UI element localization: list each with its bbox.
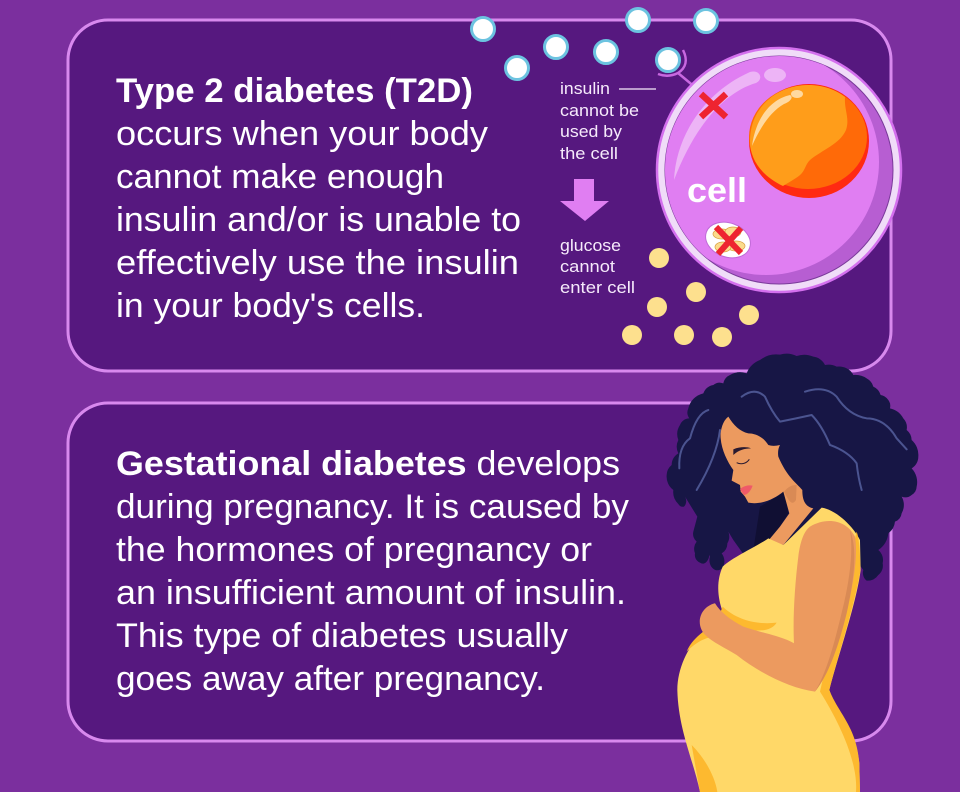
panel: gestational diabetes — [68, 403, 891, 741]
icon: insulin molecules — [472, 8, 718, 80]
text block: gestational description: during pregnancy. It is caused by — [116, 488, 629, 526]
text block: type 2 description: in your body's cells. — [116, 287, 425, 325]
text block: type 2 description: effectively use the insulin — [116, 244, 519, 282]
cell highlight — [674, 71, 760, 180]
label: insulin cannot be used: used by — [560, 122, 623, 141]
cell interior — [653, 49, 879, 275]
label: insulin cannot be used — [560, 79, 656, 163]
text block: type 2 description: insulin and/or is unable to — [116, 201, 521, 239]
arrow: down — [560, 179, 609, 221]
icon: glucose molecules — [622, 248, 759, 347]
text block: type 2 description — [116, 72, 521, 325]
text block: gestational description: Gestational diabetes develops — [116, 445, 620, 483]
label: glucose cannot enter cell: cannot — [560, 257, 615, 276]
label: insulin cannot be used: cannot be — [560, 101, 639, 120]
receptor — [658, 50, 696, 88]
panel: type 2 diabetes — [68, 20, 891, 371]
label: cell: cell — [687, 172, 747, 210]
label: insulin cannot be used: the cell — [560, 144, 618, 163]
illustration: pregnant woman — [667, 354, 918, 792]
text block: gestational description: the hormones of pregnancy or — [116, 531, 592, 569]
icon: cell diagram — [653, 48, 901, 292]
icon: mitochondrion crossed — [701, 216, 755, 264]
arm — [700, 521, 856, 692]
hair strands — [679, 389, 907, 490]
cell body — [657, 48, 901, 292]
text block: type 2 description: Type 2 diabetes (T2D) — [116, 72, 473, 110]
text block: gestational description: an insufficient amount of insulin. — [116, 574, 626, 612]
label: glucose cannot enter cell: enter cell — [560, 278, 635, 297]
neck and face — [721, 417, 813, 545]
label: insulin cannot be used: insulin — [560, 79, 610, 98]
text block: type 2 description: occurs when your body — [116, 115, 488, 153]
nucleus — [749, 84, 869, 198]
dress — [677, 508, 861, 792]
icon: red x on receptor — [701, 94, 726, 117]
text block: gestational description: This type of diabetes usually — [116, 617, 568, 655]
hair — [667, 354, 918, 581]
label: glucose cannot enter cell — [560, 236, 635, 297]
label: glucose cannot enter cell: glucose — [560, 236, 621, 255]
text block: gestational description — [116, 445, 629, 698]
text block: gestational description: goes away after pregnancy. — [116, 660, 545, 698]
text block: type 2 description: cannot make enough — [116, 158, 444, 196]
